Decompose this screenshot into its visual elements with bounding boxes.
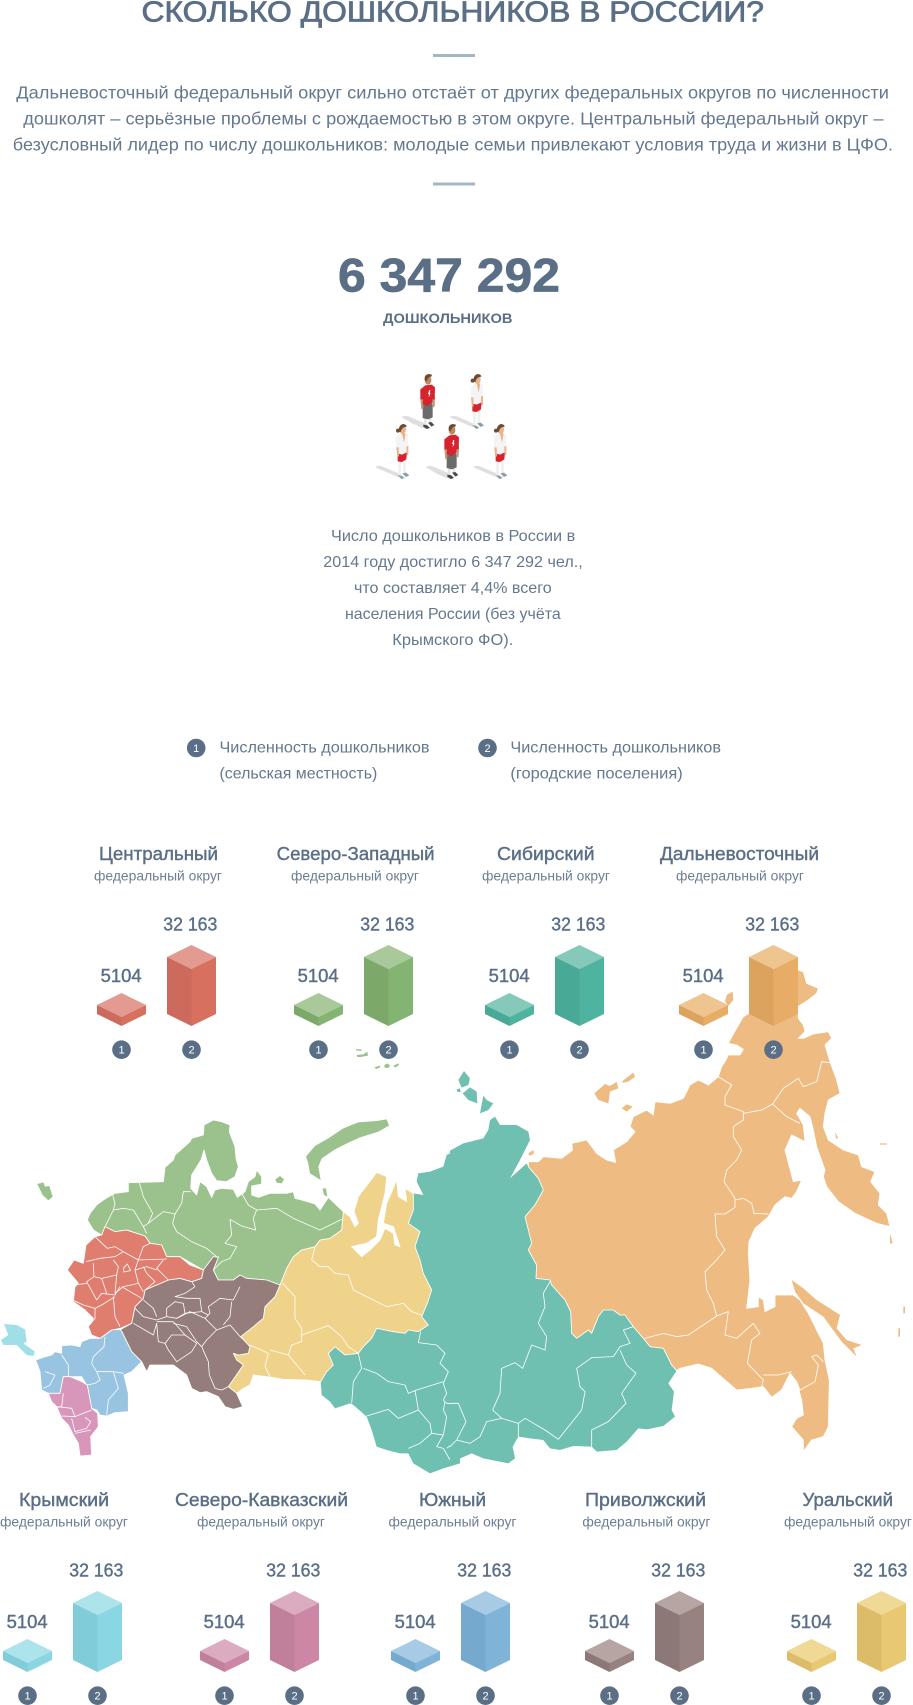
chart: North Caucasian blocks: 1 bbox=[221, 1691, 228, 1703]
chart: Northwestern blocks bbox=[294, 915, 414, 1059]
heading: Siberian: Сибирский bbox=[497, 844, 595, 864]
chart: Southern blocks: 1 bbox=[412, 1691, 419, 1703]
panel: Ural district bbox=[784, 1490, 912, 1705]
chart: Ural blocks: 32 163 bbox=[853, 1561, 907, 1581]
panel: Central district bbox=[94, 844, 222, 1059]
heading: Crimean: федеральный округ bbox=[0, 1514, 128, 1530]
heading: Far Eastern bbox=[660, 844, 819, 884]
intro paragraph: безусловный лидер по числу дошкольников: молодые семьи привлекают условия труда и жизни в ЦФО. bbox=[13, 135, 893, 155]
chart: Ural blocks bbox=[787, 1561, 907, 1705]
legend item 1: (сельская местность) bbox=[220, 765, 377, 782]
region: Far Eastern bbox=[525, 970, 905, 1452]
region: Ural bbox=[228, 1172, 432, 1393]
big number: 6 347 292 bbox=[338, 249, 560, 302]
panel: Northwestern district bbox=[277, 844, 435, 1059]
map: eastern half bbox=[450, 970, 905, 1463]
chart: Southern blocks: 2 bbox=[482, 1691, 489, 1703]
chart: Ural blocks: 5104 bbox=[791, 1612, 832, 1632]
description text: населения России (без учёта bbox=[345, 606, 561, 623]
chart: Far Eastern blocks: 32 163 bbox=[745, 915, 799, 935]
region: Siberian (west part) bbox=[321, 1148, 460, 1473]
heading: Northwestern: Северо-Западный bbox=[277, 844, 435, 864]
description text: 2014 году достигло 6 347 292 чел., bbox=[323, 554, 583, 571]
chart: North Caucasian blocks: 5104 bbox=[204, 1612, 245, 1632]
heading: Ural: Уральский bbox=[802, 1490, 893, 1510]
intro paragraph bbox=[13, 83, 893, 155]
heading: North Caucasian: Северо-Кавказский bbox=[175, 1490, 348, 1510]
chart: North Caucasian blocks bbox=[200, 1561, 320, 1705]
intro paragraph: Дальневосточный федеральный округ сильно отстаёт от других федеральных округов по численности bbox=[16, 83, 889, 103]
heading: Ural bbox=[784, 1490, 912, 1530]
legend item 2: 2 bbox=[484, 743, 491, 755]
region: Southern bbox=[36, 1329, 142, 1416]
heading: North Caucasian: федеральный округ bbox=[197, 1514, 325, 1530]
chart: Volga blocks: 1 bbox=[606, 1691, 613, 1703]
chart: Southern blocks bbox=[391, 1561, 511, 1705]
panel: Crimean district bbox=[0, 1490, 128, 1705]
chart: Central blocks: 2 bbox=[188, 1045, 195, 1057]
legend item 2 bbox=[478, 739, 721, 782]
chart: Volga blocks: 2 bbox=[676, 1691, 683, 1703]
heading: Northwestern bbox=[277, 844, 435, 884]
heading: Central: Центральный bbox=[99, 844, 218, 864]
legend bbox=[187, 739, 721, 782]
big number caption: ДОШКОЛЬНИКОВ bbox=[383, 310, 512, 326]
panel: Volga district bbox=[582, 1490, 710, 1705]
chart: Siberian blocks: 5104 bbox=[489, 966, 530, 986]
panel: Southern district bbox=[388, 1490, 516, 1705]
panel: Far Eastern district bbox=[660, 844, 819, 1059]
chart: Siberian blocks: 32 163 bbox=[551, 915, 605, 935]
chart: Central blocks: 1 bbox=[118, 1045, 125, 1057]
chart: North Caucasian blocks: 2 bbox=[291, 1691, 298, 1703]
heading: Volga: Приволжский bbox=[585, 1490, 706, 1510]
internal borders, west bbox=[43, 1183, 460, 1460]
map of Russia by federal district bbox=[1, 970, 905, 1473]
description text: Крымского ФО). bbox=[392, 632, 513, 649]
panel: Siberian district bbox=[482, 844, 610, 1059]
heading: Siberian: федеральный округ bbox=[482, 868, 610, 884]
region: North Caucasian bbox=[48, 1377, 98, 1456]
panel: North Caucasian district bbox=[175, 1490, 348, 1705]
heading: Far Eastern: федеральный округ bbox=[676, 868, 804, 884]
chart: Northwestern blocks: 1 bbox=[315, 1045, 322, 1057]
heading: Siberian bbox=[482, 844, 610, 884]
chart: Crimean blocks bbox=[3, 1561, 123, 1705]
heading: Southern: Южный bbox=[419, 1490, 486, 1510]
heading: Southern: федеральный округ bbox=[388, 1514, 516, 1530]
heading: Crimean bbox=[0, 1490, 128, 1530]
chart: Far Eastern blocks: 2 bbox=[770, 1045, 777, 1057]
chart: Central blocks: 32 163 bbox=[163, 915, 217, 935]
heading: Ural: федеральный округ bbox=[784, 1514, 912, 1530]
description text: Число дошкольников в России в bbox=[331, 528, 575, 545]
chart: Northwestern blocks: 5104 bbox=[298, 966, 339, 986]
heading: Volga bbox=[582, 1490, 710, 1530]
heading: Southern bbox=[388, 1490, 516, 1530]
chart: Northwestern blocks: 2 bbox=[385, 1045, 392, 1057]
chart: Far Eastern blocks: 1 bbox=[700, 1045, 707, 1057]
chart: North Caucasian blocks: 32 163 bbox=[266, 1561, 320, 1581]
chart: Crimean blocks: 32 163 bbox=[69, 1561, 123, 1581]
region: Northwestern bbox=[37, 1119, 389, 1285]
heading: North Caucasian bbox=[175, 1490, 348, 1530]
chart: Southern blocks: 5104 bbox=[395, 1612, 436, 1632]
chart: Crimean blocks: 2 bbox=[94, 1691, 101, 1703]
heading: Northwestern: федеральный округ bbox=[291, 868, 419, 884]
legend item 1 bbox=[187, 739, 430, 782]
chart: Volga blocks: 5104 bbox=[589, 1612, 630, 1632]
chart: Crimean blocks: 1 bbox=[24, 1691, 31, 1703]
chart: Volga blocks bbox=[585, 1561, 705, 1705]
chart: Far Eastern blocks: 5104 bbox=[683, 966, 724, 986]
description text: что составляет 4,4% всего bbox=[354, 580, 552, 597]
heading: Crimean: Крымский bbox=[19, 1490, 109, 1510]
map: arctic islands bbox=[356, 1049, 493, 1113]
heading: Central: федеральный округ bbox=[94, 868, 222, 884]
chart: Central blocks: 5104 bbox=[101, 966, 142, 986]
region: Crimean bbox=[1, 1324, 35, 1356]
description text bbox=[323, 528, 583, 649]
intro paragraph: дошколят – серьёзные проблемы с рождаемостью в этом округе. Центральный федеральный округ – bbox=[23, 109, 884, 129]
map: western half bbox=[1, 1119, 460, 1473]
chart: Crimean blocks: 5104 bbox=[7, 1612, 48, 1632]
legend item 1: 1 bbox=[193, 743, 199, 755]
internal borders, east bbox=[450, 1062, 830, 1447]
chart: Siberian blocks bbox=[485, 915, 605, 1059]
chart: Southern blocks: 32 163 bbox=[457, 1561, 511, 1581]
region: Volga bbox=[121, 1257, 280, 1409]
chart: Ural blocks: 1 bbox=[808, 1691, 815, 1703]
heading: Volga: федеральный округ bbox=[582, 1514, 710, 1530]
legend item 2: Численность дошкольников bbox=[510, 739, 721, 756]
chart: Siberian blocks: 2 bbox=[576, 1045, 583, 1057]
heading: Far Eastern: Дальневосточный bbox=[660, 844, 819, 864]
icon: group of five children bbox=[375, 374, 507, 479]
chart: Northwestern blocks: 32 163 bbox=[360, 915, 414, 935]
legend item 1: Численность дошкольников bbox=[220, 739, 430, 756]
chart: Volga blocks: 32 163 bbox=[651, 1561, 705, 1581]
chart: Ural blocks: 2 bbox=[878, 1691, 885, 1703]
chart: Siberian blocks: 1 bbox=[506, 1045, 513, 1057]
chart: Far Eastern blocks bbox=[679, 915, 799, 1059]
legend item 2: (городские поселения) bbox=[510, 765, 683, 782]
region: Central bbox=[67, 1227, 203, 1338]
region: Siberian (east part) bbox=[450, 1117, 677, 1463]
heading: Central bbox=[94, 844, 222, 884]
chart: Central blocks bbox=[97, 915, 217, 1059]
